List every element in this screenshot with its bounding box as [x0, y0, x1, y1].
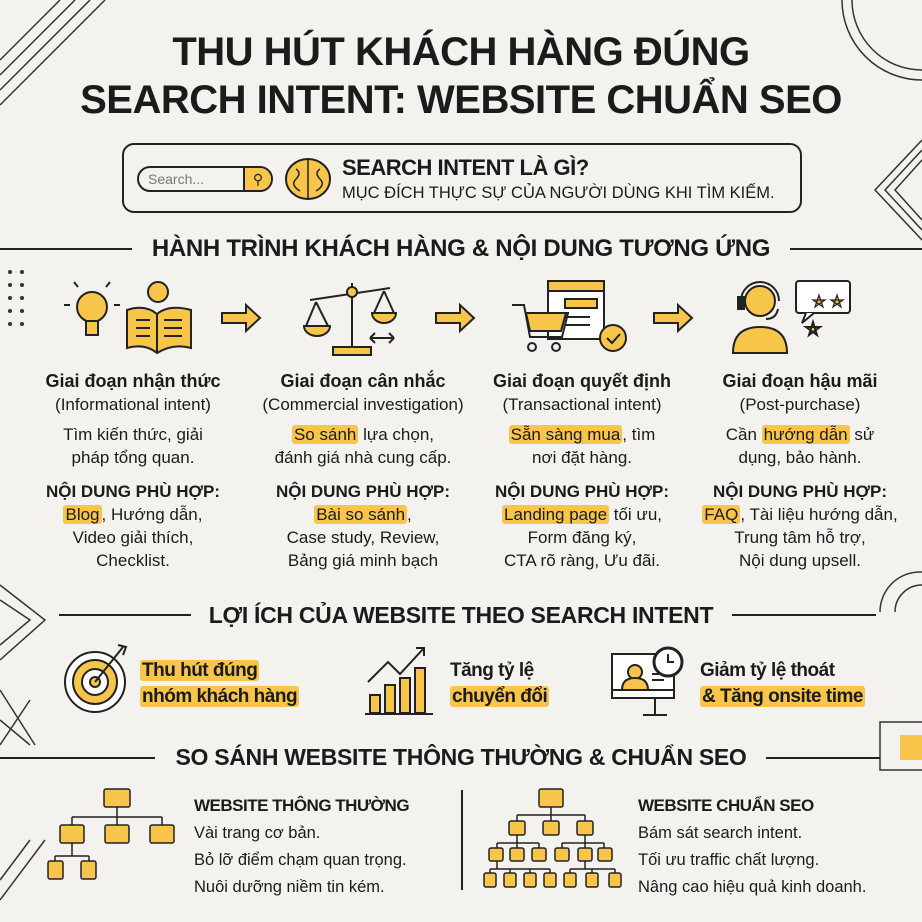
- support: [733, 281, 850, 353]
- text: Giai đoạn hậu mãi: [722, 371, 878, 391]
- text: & Tăng onsite time: [702, 686, 863, 707]
- text: SEO website: Tối ưu traffic chất lượng.: [638, 851, 819, 869]
- search box: [137, 166, 273, 192]
- bulbs/book: [64, 282, 191, 353]
- arrows: [222, 305, 260, 331]
- text: dụng, bảo hành.: [739, 448, 861, 467]
- text: Case study, Review,: [287, 528, 439, 547]
- search box: Search...: [148, 171, 204, 187]
- text: SEO website: Nâng cao hiệu quả kinh doanh.: [638, 878, 866, 896]
- text: Cần hướng dẫn sử: [726, 425, 874, 444]
- text: SEO website: [638, 796, 866, 896]
- benefits row: [64, 644, 684, 716]
- text: Tăng tỷ lệ: [450, 660, 534, 681]
- stage columns: Giai đoạn nhận thức: [45, 371, 221, 391]
- text: nơi đặt hàng.: [532, 448, 632, 467]
- title: SEARCH INTENT: WEBSITE CHUẨN SEO: [80, 78, 842, 122]
- text: NỘI DUNG PHÙ HỢP:: [713, 482, 887, 501]
- text: Trung tâm hỗ trợ,: [734, 528, 866, 547]
- scale: [304, 283, 396, 355]
- text: SEO website: Bám sát search intent.: [638, 824, 802, 842]
- title: THU HÚT KHÁCH HÀNG ĐÚNG: [172, 30, 750, 74]
- text: normal website: Nuôi dưỡng niềm tin kém.: [194, 878, 385, 896]
- comparison trees: [47, 788, 622, 890]
- text: normal website: WEBSITE THÔNG THƯỜNG: [194, 796, 409, 815]
- text: Bảng giá minh bạch: [288, 551, 438, 570]
- title: [80, 30, 842, 122]
- heading: benefits: LỢI ÍCH CỦA WEBSITE THEO SEARCH INTENT: [209, 602, 713, 628]
- text: chuyển đổi: [452, 686, 547, 707]
- icons row: [64, 280, 851, 356]
- stage columns: [45, 371, 221, 570]
- text: CTA rõ ràng, Ưu đãi.: [504, 551, 660, 570]
- text: NỘI DUNG PHÙ HỢP:: [495, 482, 669, 501]
- cart: [512, 281, 626, 351]
- text: normal website: Bỏ lỡ điểm chạm quan trọng.: [194, 851, 407, 869]
- text: normal website: [194, 796, 409, 896]
- heading: SEARCH INTENT LÀ GÌ?: [342, 155, 589, 180]
- benefit texts: [140, 660, 299, 707]
- benefit texts: nhóm khách hàng: [142, 686, 297, 707]
- text: NỘI DUNG PHÙ HỢP:: [276, 482, 450, 501]
- text: (Post-purchase) FAQ, Tài liệu hướng dẫn,: [704, 395, 898, 524]
- stage columns: Checklist.: [96, 551, 170, 570]
- heading: comparison: SO SÁNH WEBSITE THÔNG THƯỜNG & CHUẨN SEO: [175, 744, 747, 770]
- text: Giảm tỷ lệ thoát: [700, 660, 835, 681]
- text: Nội dung upsell.: [739, 551, 861, 570]
- stage columns: Tìm kiến thức, giải: [63, 425, 203, 444]
- benefit texts: Thu hút đúng: [142, 660, 257, 681]
- stage columns: NỘI DUNG PHÙ HỢP:: [46, 482, 220, 501]
- heading: journey: HÀNH TRÌNH KHÁCH HÀNG & NỘI DUNG TƯƠNG ỨNG: [152, 235, 770, 262]
- text: Giai đoạn cân nhắc: [280, 371, 446, 391]
- stage columns: Video giải thích,: [73, 528, 193, 547]
- text: MỤC ĐÍCH THỰC SỰ CỦA NGƯỜI DÙNG KHI TÌM KIẾM.: [342, 184, 775, 202]
- text: Sẵn sàng mua, tìm: [511, 425, 655, 444]
- text: Giai đoạn quyết định: [493, 371, 671, 391]
- text: (Commercial investigation) Bài so sánh,: [262, 395, 464, 524]
- icon: brain: [285, 158, 331, 200]
- text: (Transactional intent) Landing page tối ưu,: [502, 395, 662, 524]
- stage columns: (Informational intent) Blog, Hướng dẫn,: [55, 395, 211, 524]
- text: đánh giá nhà cung cấp.: [275, 448, 451, 467]
- search box: ⚲: [253, 171, 263, 187]
- text: SEO website: WEBSITE CHUẨN SEO: [638, 796, 814, 815]
- text: Form đăng ký,: [528, 528, 636, 547]
- stage columns: pháp tổng quan.: [72, 448, 194, 467]
- text: So sánh lựa chọn,: [294, 425, 434, 444]
- text: normal website: Vài trang cơ bản.: [194, 824, 320, 842]
- panel: search intent definition: [122, 143, 802, 213]
